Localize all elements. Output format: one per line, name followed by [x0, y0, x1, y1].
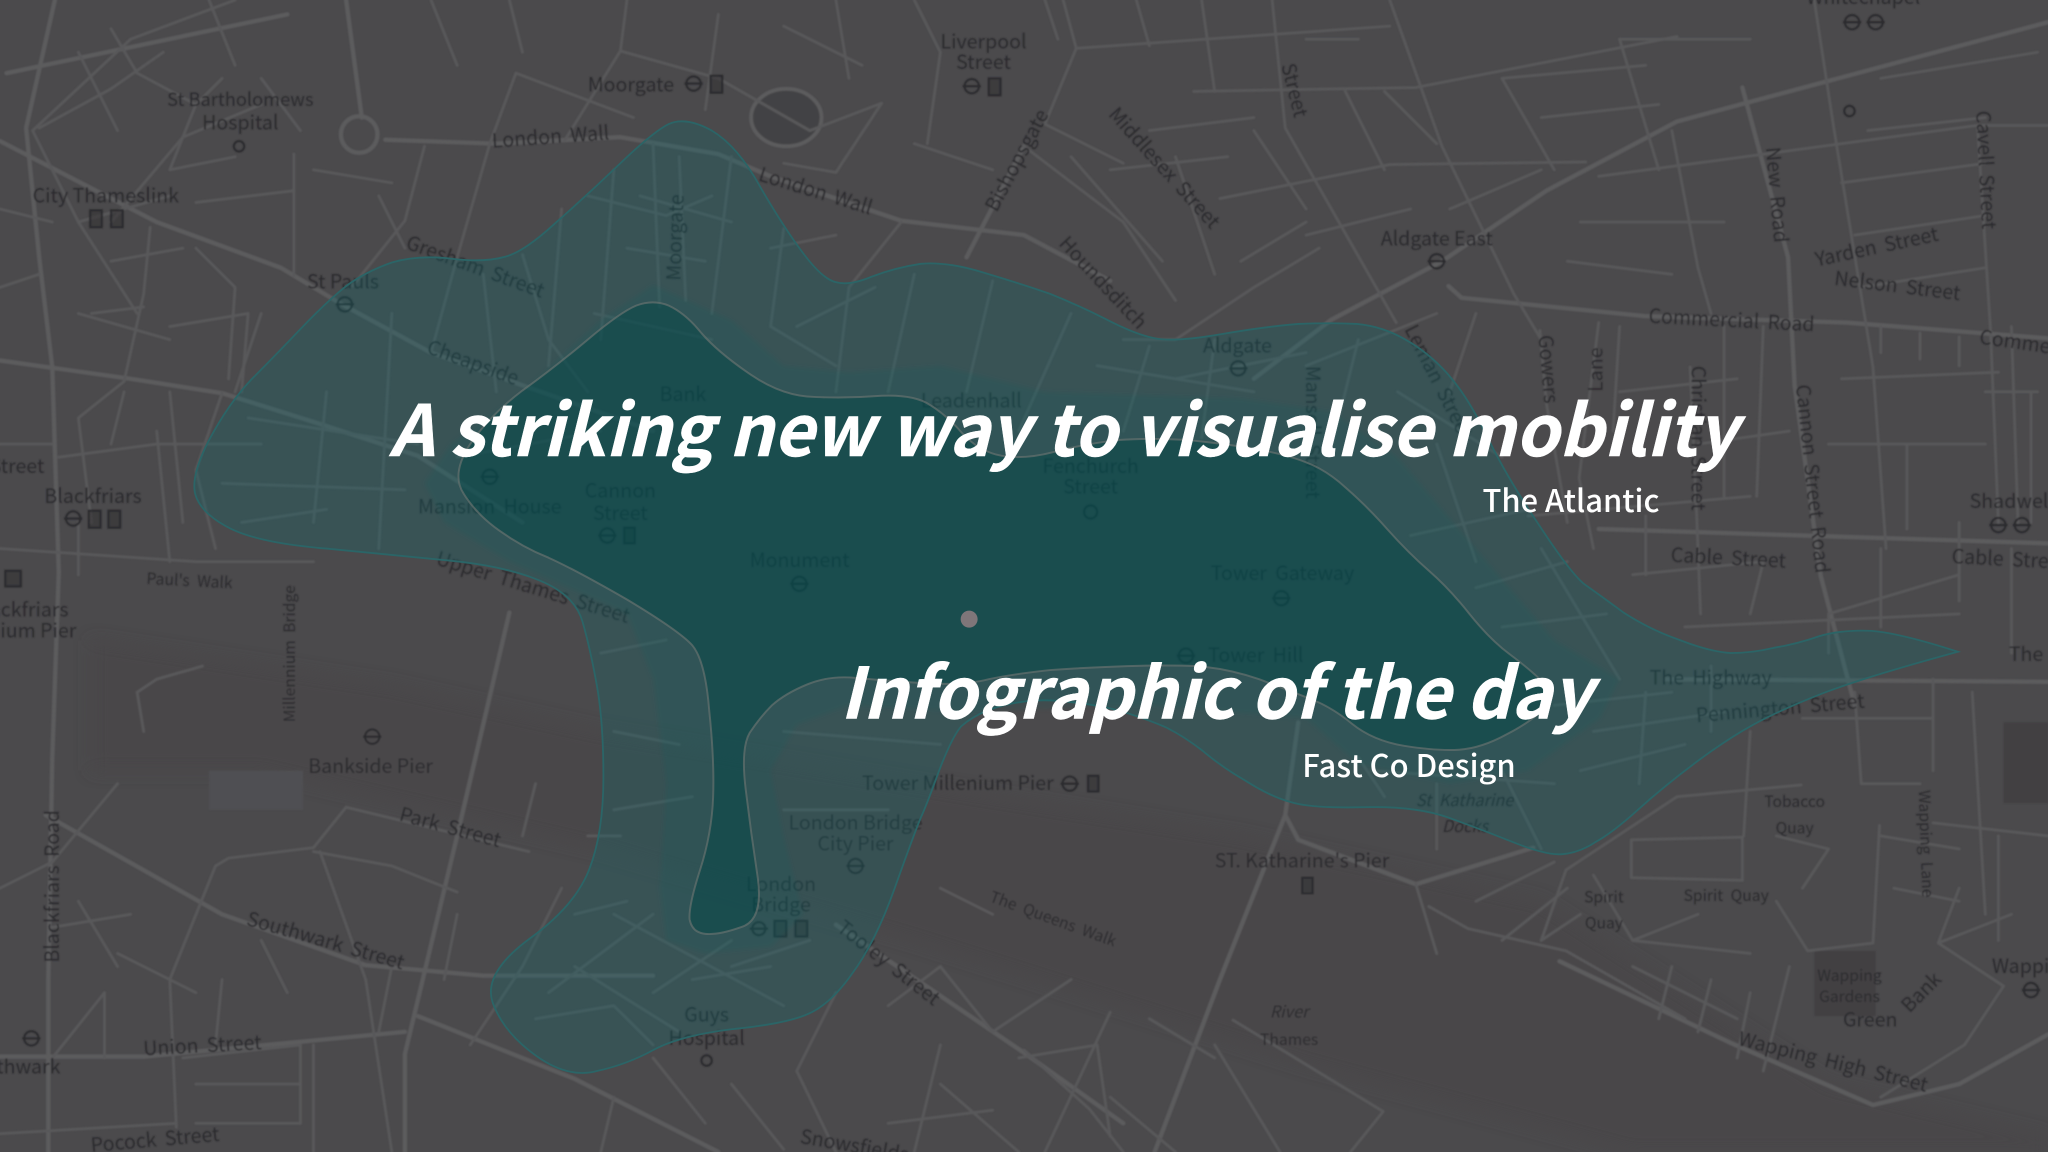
street and station labels: Docks: [1442, 813, 1489, 837]
street and station labels: City Thameslink: [33, 179, 179, 208]
street and station labels: Bridge: [751, 889, 811, 918]
street and station labels: The Queens Walk: [987, 884, 1120, 952]
isochrone: outer travel-time area: [194, 121, 1958, 1073]
street and station labels: Quay: [1585, 911, 1623, 934]
wapping gardens and dock blocks: [1814, 722, 2048, 1016]
street and station labels: Tooley Street: [832, 912, 948, 1011]
street and station labels: Quay: [1776, 815, 1814, 838]
river thames: [91, 640, 2048, 1152]
street and station labels: Christian Street: [1685, 366, 1714, 511]
street and station labels: Cavell Street: [1970, 110, 2005, 230]
street and station labels: Wapping High Street: [1736, 1023, 1932, 1098]
street and station labels: Street: [956, 46, 1012, 75]
street and station labels: Gardens: [1819, 984, 1880, 1007]
street and station labels: Tower Hill: [1208, 639, 1303, 668]
isochrone: middle travel-time area: [424, 285, 1620, 953]
street and station labels: Park Street: [397, 798, 505, 853]
street and station labels: River: [1270, 998, 1311, 1022]
street and station labels: Fenchurch: [1042, 450, 1139, 479]
street and station labels: Millennium Bridge: [277, 585, 300, 722]
street and station labels: London Wall: [756, 158, 877, 220]
street and station labels: Mansell Street: [1300, 366, 1329, 499]
street and station labels: St Pauls: [307, 266, 379, 295]
isochrone: inner travel-time area: [458, 302, 1550, 934]
source: fast co design: Fast Co Design: [1302, 741, 1516, 786]
street and station labels: Blackfriars Road: [36, 810, 65, 963]
street and station labels: Street: [593, 497, 648, 526]
street and station labels: Cheapside: [424, 331, 524, 391]
street and station labels: St Katharine: [1416, 787, 1515, 811]
street and station labels: Monument: [750, 544, 850, 573]
street and station labels: Street: [1063, 471, 1119, 500]
street and station labels: Liverpool: [941, 25, 1027, 54]
street and station labels: Tower Millenium Pier: [862, 767, 1054, 796]
street and station labels: The Highway: [1650, 661, 1772, 690]
street and station labels: London Wall: [491, 116, 610, 154]
street and station labels: Aldgate East: [1381, 223, 1493, 252]
street and station labels: Moorgate: [588, 68, 674, 97]
street and station labels: Bishopsgate: [976, 103, 1054, 216]
street and station labels: Yarden Street: [1811, 218, 1941, 273]
street and station labels: ST. Katharine's Pier: [1215, 844, 1390, 873]
street and station labels: Bank: [1893, 964, 1947, 1018]
finsbury circus oval: [751, 89, 822, 146]
heading: infographic of the day: Infographic of the day: [840, 637, 1602, 739]
street and station labels: Cable Street: [1670, 539, 1787, 574]
street and station labels: Tobacco: [1764, 789, 1825, 812]
street and station labels: Bank: [660, 378, 706, 407]
street and station labels: Nelson Street: [1833, 262, 1963, 306]
street and station labels: Union Street: [142, 1026, 263, 1061]
source: the atlantic: The Atlantic: [1482, 476, 1659, 521]
street and station labels: Commercial Road: [1648, 300, 1815, 337]
street and station labels: Leman Street: [1399, 319, 1482, 444]
street and station labels: Pennington Street: [1695, 685, 1866, 728]
street and station labels: Hospital: [668, 1022, 745, 1051]
street and station labels: Mansion House: [418, 490, 562, 519]
street and station labels: Aldgate: [1203, 330, 1272, 359]
street and station labels: Guys: [684, 998, 729, 1027]
street and station labels: Upper Thames Street: [433, 542, 634, 629]
street and station labels: St Bartholomews: [167, 86, 314, 112]
street and station labels: Thames: [1260, 1027, 1318, 1050]
street and station labels: Lane: [1580, 347, 1609, 392]
street and station labels: Gresham Street: [403, 227, 550, 304]
street and station labels: Moorgate: [658, 194, 690, 281]
street and station labels: Blackfriars: [44, 480, 142, 509]
street and station labels: Spirit: [1584, 885, 1624, 908]
street and station labels: Wapping Lane: [1914, 790, 1940, 898]
street and station labels: London Bridge: [788, 806, 923, 835]
street and station labels: Green: [1843, 1004, 1897, 1033]
street and station labels: Houndsditch: [1054, 229, 1155, 334]
street and station labels: Wapping: [1817, 963, 1882, 986]
street and station labels: Gowers: [1533, 334, 1567, 404]
street and station labels: Street: [1275, 60, 1317, 120]
street and station labels: Leadenhall: [921, 385, 1022, 414]
origin point: [961, 611, 978, 628]
street and station labels: Paul's Walk: [146, 566, 234, 593]
street and station labels: Southwark Street: [244, 903, 409, 976]
street and station labels: City Pier: [817, 827, 894, 856]
heading: a striking new way to visualise mobility: A striking new way to visualise mobility: [388, 375, 1747, 477]
street and station labels: Bankside Pier: [308, 750, 433, 779]
street and station labels: New Road: [1760, 146, 1797, 244]
street and station labels: Cannon: [585, 475, 656, 504]
street and station labels: Hospital: [202, 106, 278, 135]
street and station labels: Tower Gateway: [1211, 557, 1354, 586]
street and station labels: Spirit Quay: [1684, 883, 1769, 906]
street and station labels: London: [746, 868, 816, 897]
street and station labels: Cannon Street Road: [1790, 383, 1839, 574]
street and station labels: Middlesex Street: [1103, 100, 1229, 234]
